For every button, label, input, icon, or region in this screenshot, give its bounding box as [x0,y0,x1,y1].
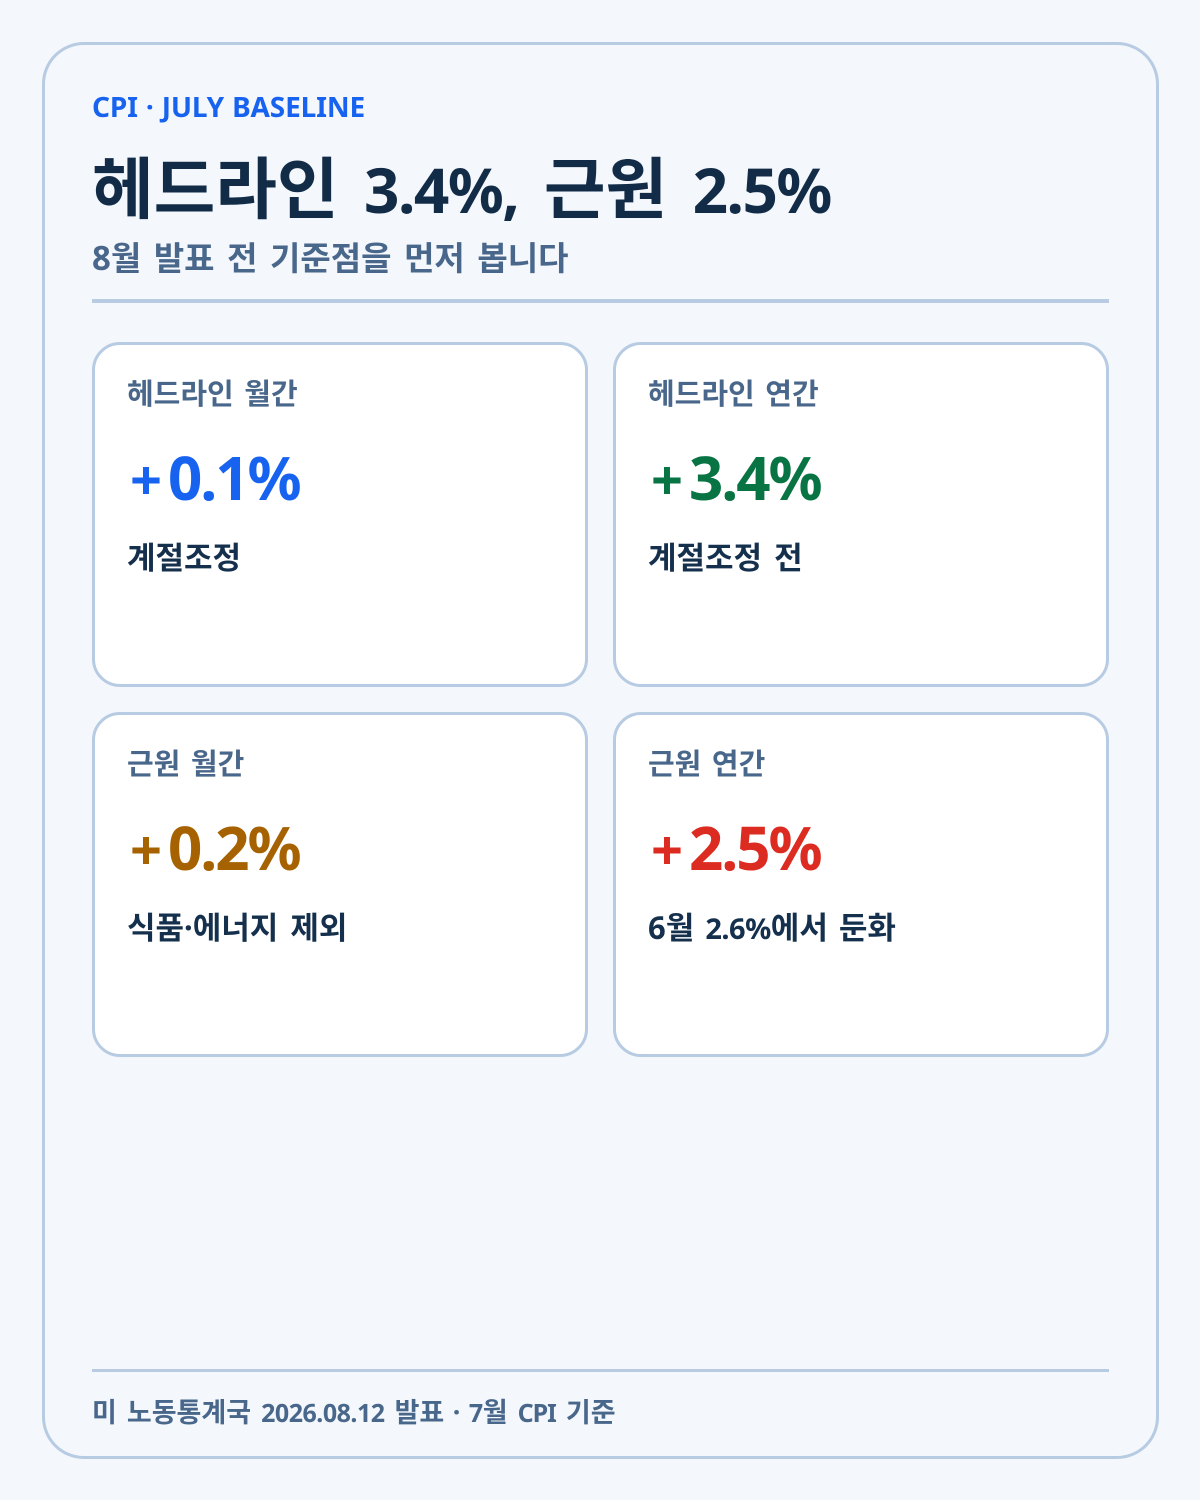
note: 식품·에너지 제외 [127,907,347,949]
value: +3.4% [651,436,821,518]
note: 6월 2.6%에서 둔화 [648,907,896,949]
value: +0.1% [130,436,300,518]
footer source: 미 노동통계국 2026.08.12 발표 · 7월 CPI 기준 [92,1393,616,1430]
eyebrow: CPI · JULY BASELINE [92,88,365,126]
panel: core monthly [92,712,588,1057]
label: 헤드라인 연간 [648,374,819,413]
panel: core yearly [613,712,1109,1057]
subtitle: 8월 발표 전 기준점을 먼저 봅니다 [92,235,568,280]
note: 계절조정 전 [648,537,803,579]
label: 헤드라인 월간 [127,374,298,413]
note: 계절조정 [127,537,241,579]
value: +0.2% [130,806,300,888]
label: 근원 월간 [127,744,244,783]
panel: headline yearly [613,342,1109,687]
title: 헤드라인 3.4%, 근원 2.5% [92,141,831,233]
label: 근원 연간 [648,744,765,783]
panel: headline monthly [92,342,588,687]
value: +2.5% [651,806,821,888]
